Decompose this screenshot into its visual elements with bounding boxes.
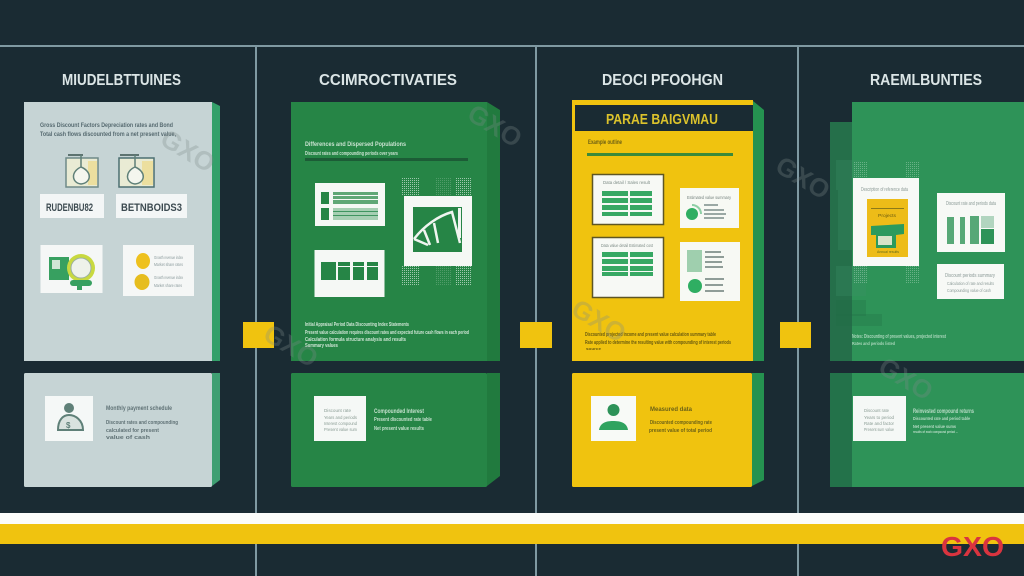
text block: header lines: Differences and Dispersed Populations — [305, 141, 406, 148]
text block: Compounded Interest — [374, 409, 424, 415]
chart card: green columns: Discount rate and periods data — [946, 201, 996, 207]
text block: bottom notes: Initial Appraisal Period Data Discounting Index Statements — [305, 322, 409, 328]
text card: Discount rate — [864, 408, 889, 413]
text block: Discount rates and compounding — [106, 420, 178, 426]
icon: person — [591, 396, 636, 441]
poster card with yellow inset: Annual results — [877, 249, 899, 254]
text card: Calculation of rate and results — [947, 281, 995, 286]
text block: Reinvested compound returns — [913, 409, 974, 415]
heading: column 3: DEOCI PFOOHGN — [602, 72, 723, 89]
icon: drop chart 1 — [66, 154, 98, 187]
text block: intro lines: Gross Discount Factors Depreciation rates and Bond — [40, 123, 173, 129]
text block: bottom notes — [852, 334, 946, 346]
text block — [649, 406, 712, 434]
heading: column 4: RAEMLBUNTIES — [870, 72, 982, 89]
text block: bottom notes: Notes: Discounting of present values, projected interest — [852, 334, 946, 340]
text card: Discount rate — [324, 408, 352, 413]
chart card: green columns — [937, 193, 1005, 252]
text block — [106, 406, 178, 441]
text block: calculated for present — [106, 428, 159, 434]
text block — [374, 409, 432, 432]
text card: Present value sum — [324, 427, 357, 432]
table card 2 — [592, 238, 664, 298]
heading: column 2: CCIMROCTIVATIES — [319, 72, 457, 89]
watermark 5: GXO — [259, 318, 323, 373]
text block: bottom notes — [305, 322, 469, 349]
icon: person with dollar — [45, 396, 93, 441]
table card 2 — [314, 250, 384, 297]
table card 1 — [592, 174, 664, 224]
text block: bottom notes: Discounted projected income and present value calculation summary table — [585, 332, 716, 338]
text card: Discount periods summary — [945, 273, 995, 279]
text card: Interest compound — [324, 421, 357, 426]
text block: bottom notes: Summary values — [305, 343, 338, 349]
text block: Monthly payment schedule — [106, 406, 173, 412]
poster card with yellow inset: Description of reference data — [861, 187, 908, 193]
text block: results of each compound period ... — [913, 430, 958, 434]
text block: bottom notes: source — [586, 346, 602, 351]
table card 1 — [315, 183, 385, 226]
info card 1: Estimated value summary — [687, 195, 732, 200]
connector: square 2 — [520, 322, 552, 348]
table card 2: Data value detail Estimated cost — [601, 243, 654, 248]
icon card: green and yellow dial — [40, 245, 102, 293]
poster card with yellow inset: Projects — [878, 213, 897, 218]
text block: header lines — [305, 141, 406, 157]
info card 1 — [680, 188, 739, 228]
text block: bottom notes — [585, 332, 731, 351]
banner: dark header with title — [575, 105, 753, 131]
connector: square 3 — [780, 322, 811, 348]
icon: drop chart 2 — [119, 154, 154, 187]
table card 1: Data detail / Sales result — [603, 180, 651, 185]
label box 2: BETNBOIDS3 — [121, 202, 182, 214]
text block: value of cash — [106, 435, 151, 441]
text block: Measured data — [650, 406, 692, 413]
poster card with yellow inset — [853, 178, 919, 266]
text: sub heading: Example outline — [588, 140, 622, 146]
text block: present value of total period — [649, 428, 712, 434]
icon: person with dollar: $ — [66, 421, 71, 430]
text block: Present discounted rate table — [374, 417, 432, 423]
icon card: two coins with text — [123, 245, 194, 296]
text block: bottom notes: Rate applied to determine the resulting value with compounding of interest periods — [585, 340, 731, 346]
panel: column 3 lower card — [572, 373, 764, 487]
label box 1: RUDENBU82 — [46, 202, 93, 214]
panel: column 1 lower card — [24, 373, 220, 487]
text block: Net present value sums — [913, 424, 956, 429]
icon card: curve diagram — [404, 196, 472, 266]
icon card: two coins with text: Market share rates — [154, 262, 184, 267]
icon card: two coins with text: Growth revenue index — [154, 275, 183, 280]
heading: column 1: MIUDELBTTUINES — [62, 72, 181, 89]
label box 1 — [40, 194, 104, 218]
text block — [913, 409, 974, 434]
text block: Discounted rate and period table — [913, 416, 970, 421]
watermark 6: GXO — [874, 351, 938, 406]
panel: column 2 lower card — [291, 373, 500, 487]
panel: column 3 main card — [572, 100, 764, 361]
text card: Years and periods — [324, 415, 358, 420]
watermark 1: GXO — [156, 123, 220, 178]
label box 2 — [116, 194, 187, 218]
panel: column 2 main card — [291, 102, 500, 361]
text card: Present sum value — [864, 427, 894, 432]
text block: Net present value results — [374, 426, 424, 432]
watermark 4: GXO — [567, 293, 631, 348]
dotted pattern strips — [402, 178, 472, 285]
bottom band: yellow stripe — [0, 524, 1024, 544]
info card 2 — [680, 242, 740, 301]
watermark 3: GXO — [771, 150, 835, 205]
icon card: two coins with text: Market share rates — [154, 283, 183, 288]
text block: intro lines: Total cash flows discounted from a net present value, — [40, 132, 176, 138]
mosaic blocks on ghost layer — [836, 160, 882, 326]
text card — [314, 396, 366, 441]
text card: Years to period — [864, 415, 894, 420]
panel: column 1 main card — [24, 102, 220, 361]
text block: Discounted compounding rate — [650, 420, 712, 426]
text card — [937, 264, 1004, 299]
text card: Compounding value of cash — [947, 288, 991, 293]
banner: dark header with title: PARAE BAIGVMAU — [606, 111, 718, 128]
logo: red GXO: GXO — [941, 531, 1004, 562]
text block: bottom notes: Present value calculation requires discount rates and expected future cash flows in each period — [305, 330, 469, 336]
text block: bottom notes: Rates and periods listed — [852, 341, 895, 346]
icon card: two coins with text: Growth revenue index — [154, 255, 183, 260]
text card: Rate and factor — [864, 421, 894, 426]
text block: intro lines — [40, 123, 176, 138]
text block: header lines: Discount rates and compounding periods over years — [305, 151, 398, 157]
bottom band: white stripe — [0, 513, 1024, 524]
panel: column 4 lower card — [830, 373, 1024, 487]
dotted pattern strips — [853, 162, 920, 283]
watermark 2: GXO — [463, 98, 527, 153]
text block: bottom notes: Calculation formula structure analysis and results — [305, 337, 406, 343]
text card — [853, 396, 906, 441]
panel: column 4 main card — [830, 102, 1024, 361]
connector: square 1 — [243, 322, 274, 348]
